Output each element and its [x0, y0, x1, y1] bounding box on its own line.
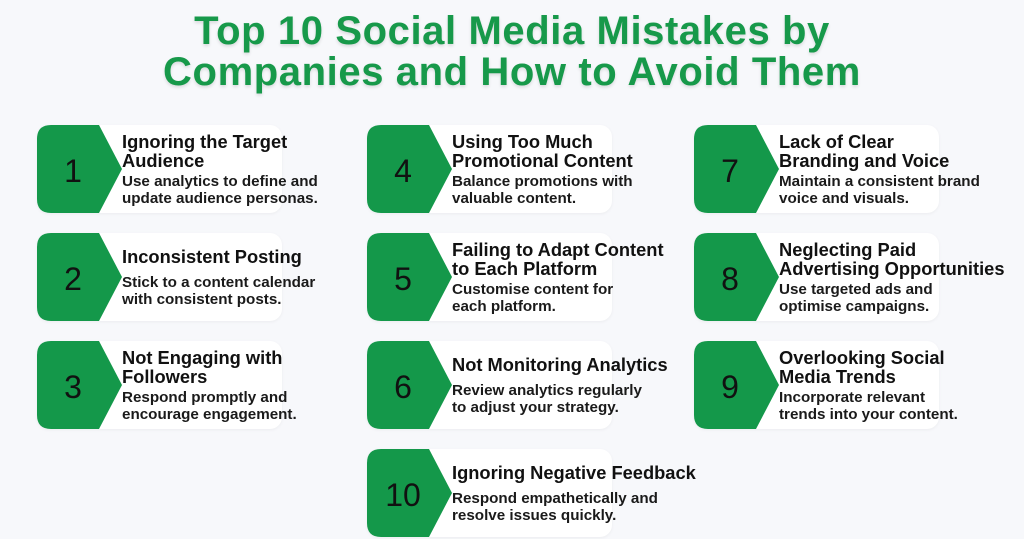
card 8: Advertising Opportunities: [779, 258, 1004, 278]
card 5: each platform.: [452, 298, 556, 314]
card 9: 9: [721, 369, 739, 405]
card 6: to adjust your strategy.: [452, 398, 619, 416]
card 4: Using Too Much: [452, 130, 593, 152]
icon: badge 8: [694, 233, 779, 321]
card 1: 1: [64, 153, 82, 189]
card 3: 3: [64, 369, 82, 405]
card 1: update audience personas.: [122, 190, 318, 206]
card 9: Overlooking Social: [779, 346, 945, 368]
card 10: Ignoring Negative Feedback: [452, 462, 696, 482]
card 5: 5: [394, 261, 412, 297]
card 1: Audience: [122, 150, 204, 170]
card 4: [367, 125, 633, 213]
card 6: [367, 341, 668, 429]
card 2: Inconsistent Posting: [122, 246, 302, 266]
card 7: Branding and Voice: [779, 150, 949, 170]
card 6: 6: [394, 369, 412, 405]
icon: badge 4: [367, 125, 452, 213]
card 8: Neglecting Paid: [779, 238, 916, 260]
card 2: 2: [64, 261, 82, 297]
card 4: Balance promotions with: [452, 172, 633, 190]
card 1: [37, 125, 318, 213]
card 5: Customise content for: [452, 280, 613, 298]
card 4: valuable content.: [452, 190, 576, 206]
card 10: resolve issues quickly.: [452, 506, 616, 524]
card 3: Respond promptly and: [122, 388, 287, 406]
title: [163, 9, 861, 96]
icon: badge 3: [37, 341, 122, 429]
icon: badge 2: [37, 233, 122, 321]
card 9: trends into your content.: [779, 406, 958, 422]
card 2: with consistent posts.: [122, 290, 281, 308]
card 8: optimise campaigns.: [779, 298, 929, 314]
card 5: to Each Platform: [452, 258, 597, 278]
card 10: Respond empathetically and: [452, 490, 658, 506]
card 4: Promotional Content: [452, 150, 633, 170]
card 8: 8: [721, 261, 739, 297]
card 3: Not Engaging with: [122, 346, 282, 368]
title: Top 10 Social Media Mistakes by: [194, 9, 830, 53]
icon: badge 5: [367, 233, 452, 321]
card 5: [367, 233, 664, 321]
card 3: [37, 341, 297, 429]
card 1: Ignoring the Target: [122, 130, 287, 152]
card 2: [37, 233, 316, 321]
card 8: Use targeted ads and: [779, 280, 933, 298]
card 2: Stick to a content calendar: [122, 274, 315, 290]
card 1: Use analytics to define and: [122, 172, 318, 190]
card 7: 7: [721, 153, 739, 189]
card 6: Not Monitoring Analytics: [452, 354, 668, 374]
card 7: [694, 125, 980, 213]
card 10: 10: [385, 477, 421, 513]
icon: badge 9: [694, 341, 779, 429]
card 3: encourage engagement.: [122, 406, 297, 422]
card 10: [367, 449, 696, 537]
icon: badge 6: [367, 341, 452, 429]
card 4: 4: [394, 153, 412, 189]
card 5: Failing to Adapt Content: [452, 238, 664, 260]
card 9: Incorporate relevant: [779, 388, 925, 406]
card 7: Maintain a consistent brand: [779, 172, 980, 190]
card 9: Media Trends: [779, 366, 896, 386]
card 9: [694, 341, 958, 429]
card 8: [694, 233, 1004, 321]
card 7: voice and visuals.: [779, 190, 909, 206]
card 6: Review analytics regularly: [452, 382, 642, 398]
icon: badge 10: [367, 449, 452, 537]
card 3: Followers: [122, 366, 207, 386]
title: Companies and How to Avoid Them: [163, 50, 861, 94]
icon: badge 1: [37, 125, 122, 213]
card 7: Lack of Clear: [779, 130, 894, 152]
icon: badge 7: [694, 125, 779, 213]
